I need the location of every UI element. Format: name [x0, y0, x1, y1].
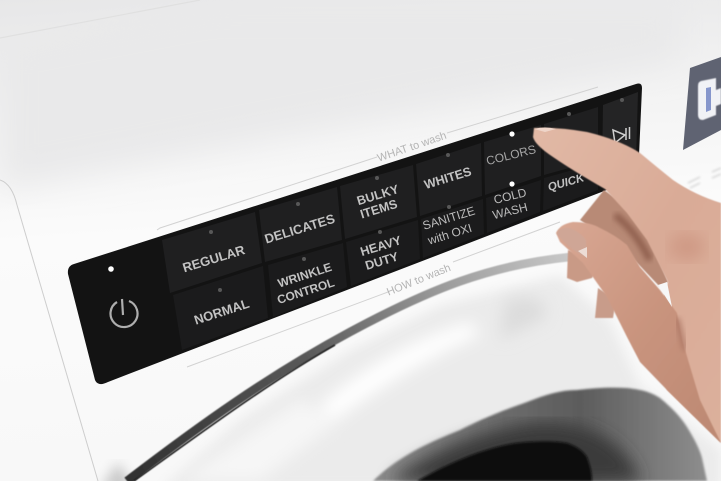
top row buttons	[162, 107, 598, 293]
WHAT to wash bracket	[157, 87, 598, 230]
HOW to wash bracket: HOW to wash	[385, 262, 453, 298]
button labels: HEAVY	[359, 233, 404, 259]
palm blush	[669, 233, 705, 261]
button labels: BULKY	[355, 182, 401, 208]
icon: power	[111, 299, 138, 327]
button labels	[181, 142, 586, 328]
middle finger	[580, 190, 668, 287]
fingernail: index	[534, 128, 556, 132]
button labels: WHITES	[423, 164, 473, 192]
button labels: DUTY	[364, 249, 401, 273]
bottom row buttons	[173, 163, 598, 350]
display digit	[698, 78, 721, 120]
button labels: WASH	[491, 200, 529, 222]
finger stubs	[567, 250, 600, 282]
gap between fingers	[658, 282, 672, 307]
door opening	[373, 388, 707, 481]
button labels: QUICK	[547, 172, 586, 194]
button labels: CONTROL	[275, 275, 336, 307]
display panel	[683, 57, 721, 150]
button labels: DELICATES	[263, 211, 337, 246]
button labels: with OXI	[425, 221, 474, 248]
button labels: WRINKLE	[276, 260, 334, 291]
small control labels near display	[688, 168, 721, 188]
active lights	[108, 131, 515, 272]
button labels: COLORS	[485, 142, 537, 168]
button labels: ITEMS	[359, 197, 399, 221]
door surface and highlights	[160, 275, 721, 481]
start button area	[602, 92, 638, 172]
button labels: REGULAR	[181, 242, 247, 275]
button labels: SANITIZE	[421, 204, 477, 233]
HOW to wash bracket	[187, 222, 560, 367]
control panel	[68, 84, 642, 384]
icon: play pause	[613, 127, 630, 143]
hand	[533, 128, 721, 443]
status lights	[209, 98, 624, 292]
palm and index finger	[533, 128, 721, 443]
finger crease shading	[677, 318, 685, 350]
fingernail: ring finger	[557, 228, 587, 258]
WHAT to wash bracket: WHAT to wash	[376, 130, 448, 165]
ring finger	[556, 222, 721, 443]
door arc groove	[127, 257, 570, 481]
button labels: COLD	[492, 185, 528, 207]
button labels: NORMAL	[192, 296, 251, 328]
